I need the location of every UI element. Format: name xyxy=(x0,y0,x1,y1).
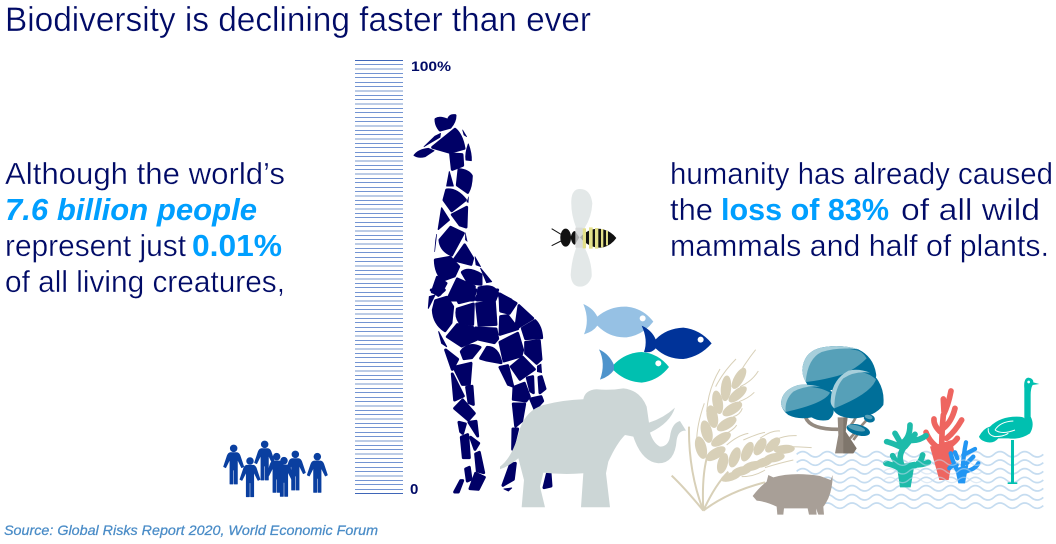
title: Biodiversity is declining faster than ever xyxy=(5,1,591,39)
scale label 100%: 100% xyxy=(411,58,452,74)
text block: right statement xyxy=(670,156,1053,263)
text block: right statement: mammals and half of plants. xyxy=(670,228,1049,263)
icon: wheat xyxy=(672,350,812,511)
icon: tree xyxy=(781,346,884,453)
text block: left statement: of all living creatures, xyxy=(5,264,285,299)
icon: light blue fish xyxy=(583,304,653,337)
text block: left statement: 7.6 billion people xyxy=(5,192,257,227)
icon: teal fish xyxy=(613,352,669,383)
text block: left statement: represent just xyxy=(5,228,186,263)
text block: left statement: Although the world’s xyxy=(5,156,285,191)
text block: right statement: loss of 83% xyxy=(721,192,889,227)
icon: teal coral xyxy=(886,425,928,487)
icon: pig xyxy=(753,474,833,515)
waves over corals xyxy=(884,460,983,483)
icon: giraffe xyxy=(414,116,551,492)
icon: dark blue fish xyxy=(642,326,712,359)
waves xyxy=(797,452,1043,508)
text block: right statement: the xyxy=(670,192,713,227)
text block: left statement: 0.01% xyxy=(192,228,282,263)
source note: Source: Global Risks Report 2020, World Economic Forum xyxy=(4,522,378,538)
scale ruler xyxy=(355,60,403,494)
icon: blue coral xyxy=(949,442,978,483)
scale label 0: 0 xyxy=(410,481,418,498)
text block: left statement xyxy=(5,156,285,299)
icon: corals xyxy=(886,391,978,487)
icon: crane xyxy=(979,378,1039,484)
icon: bee xyxy=(552,189,616,287)
icon: red coral xyxy=(926,391,962,480)
icon: people group xyxy=(224,441,327,497)
text block: right statement: of all wild xyxy=(901,192,1040,227)
icon: fish group xyxy=(583,304,712,383)
icon: elephant xyxy=(500,388,686,507)
